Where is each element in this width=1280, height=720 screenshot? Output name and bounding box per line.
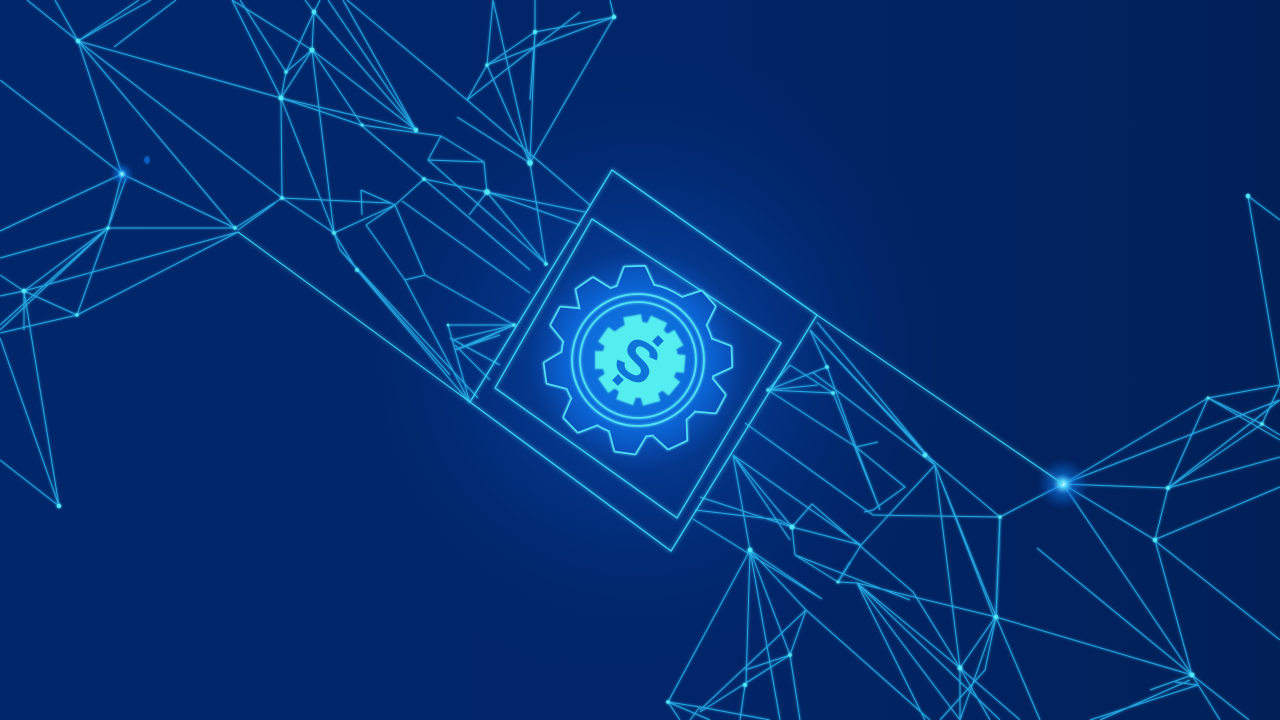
inner frame — [495, 219, 781, 518]
gear rings — [572, 294, 704, 426]
gear body fill — [543, 266, 732, 455]
outer frame — [470, 170, 817, 551]
gear outline — [543, 266, 732, 455]
band edges — [238, 232, 1063, 484]
network: right middle cluster — [745, 322, 1000, 668]
central square frames — [238, 170, 1063, 551]
network: lower middle cluster — [668, 455, 1040, 720]
gear glow — [526, 248, 750, 472]
glowing node: left hub — [110, 162, 134, 186]
inner cog — [595, 314, 686, 406]
network: upper middle cluster — [232, 0, 614, 403]
blue speck — [144, 156, 150, 164]
network: left cluster — [0, 0, 441, 506]
icon: gear with dollar sign — [543, 266, 732, 455]
dollar sign: S — [604, 323, 671, 399]
network: right cluster — [996, 196, 1280, 720]
glowing node: right hub — [1037, 458, 1089, 510]
